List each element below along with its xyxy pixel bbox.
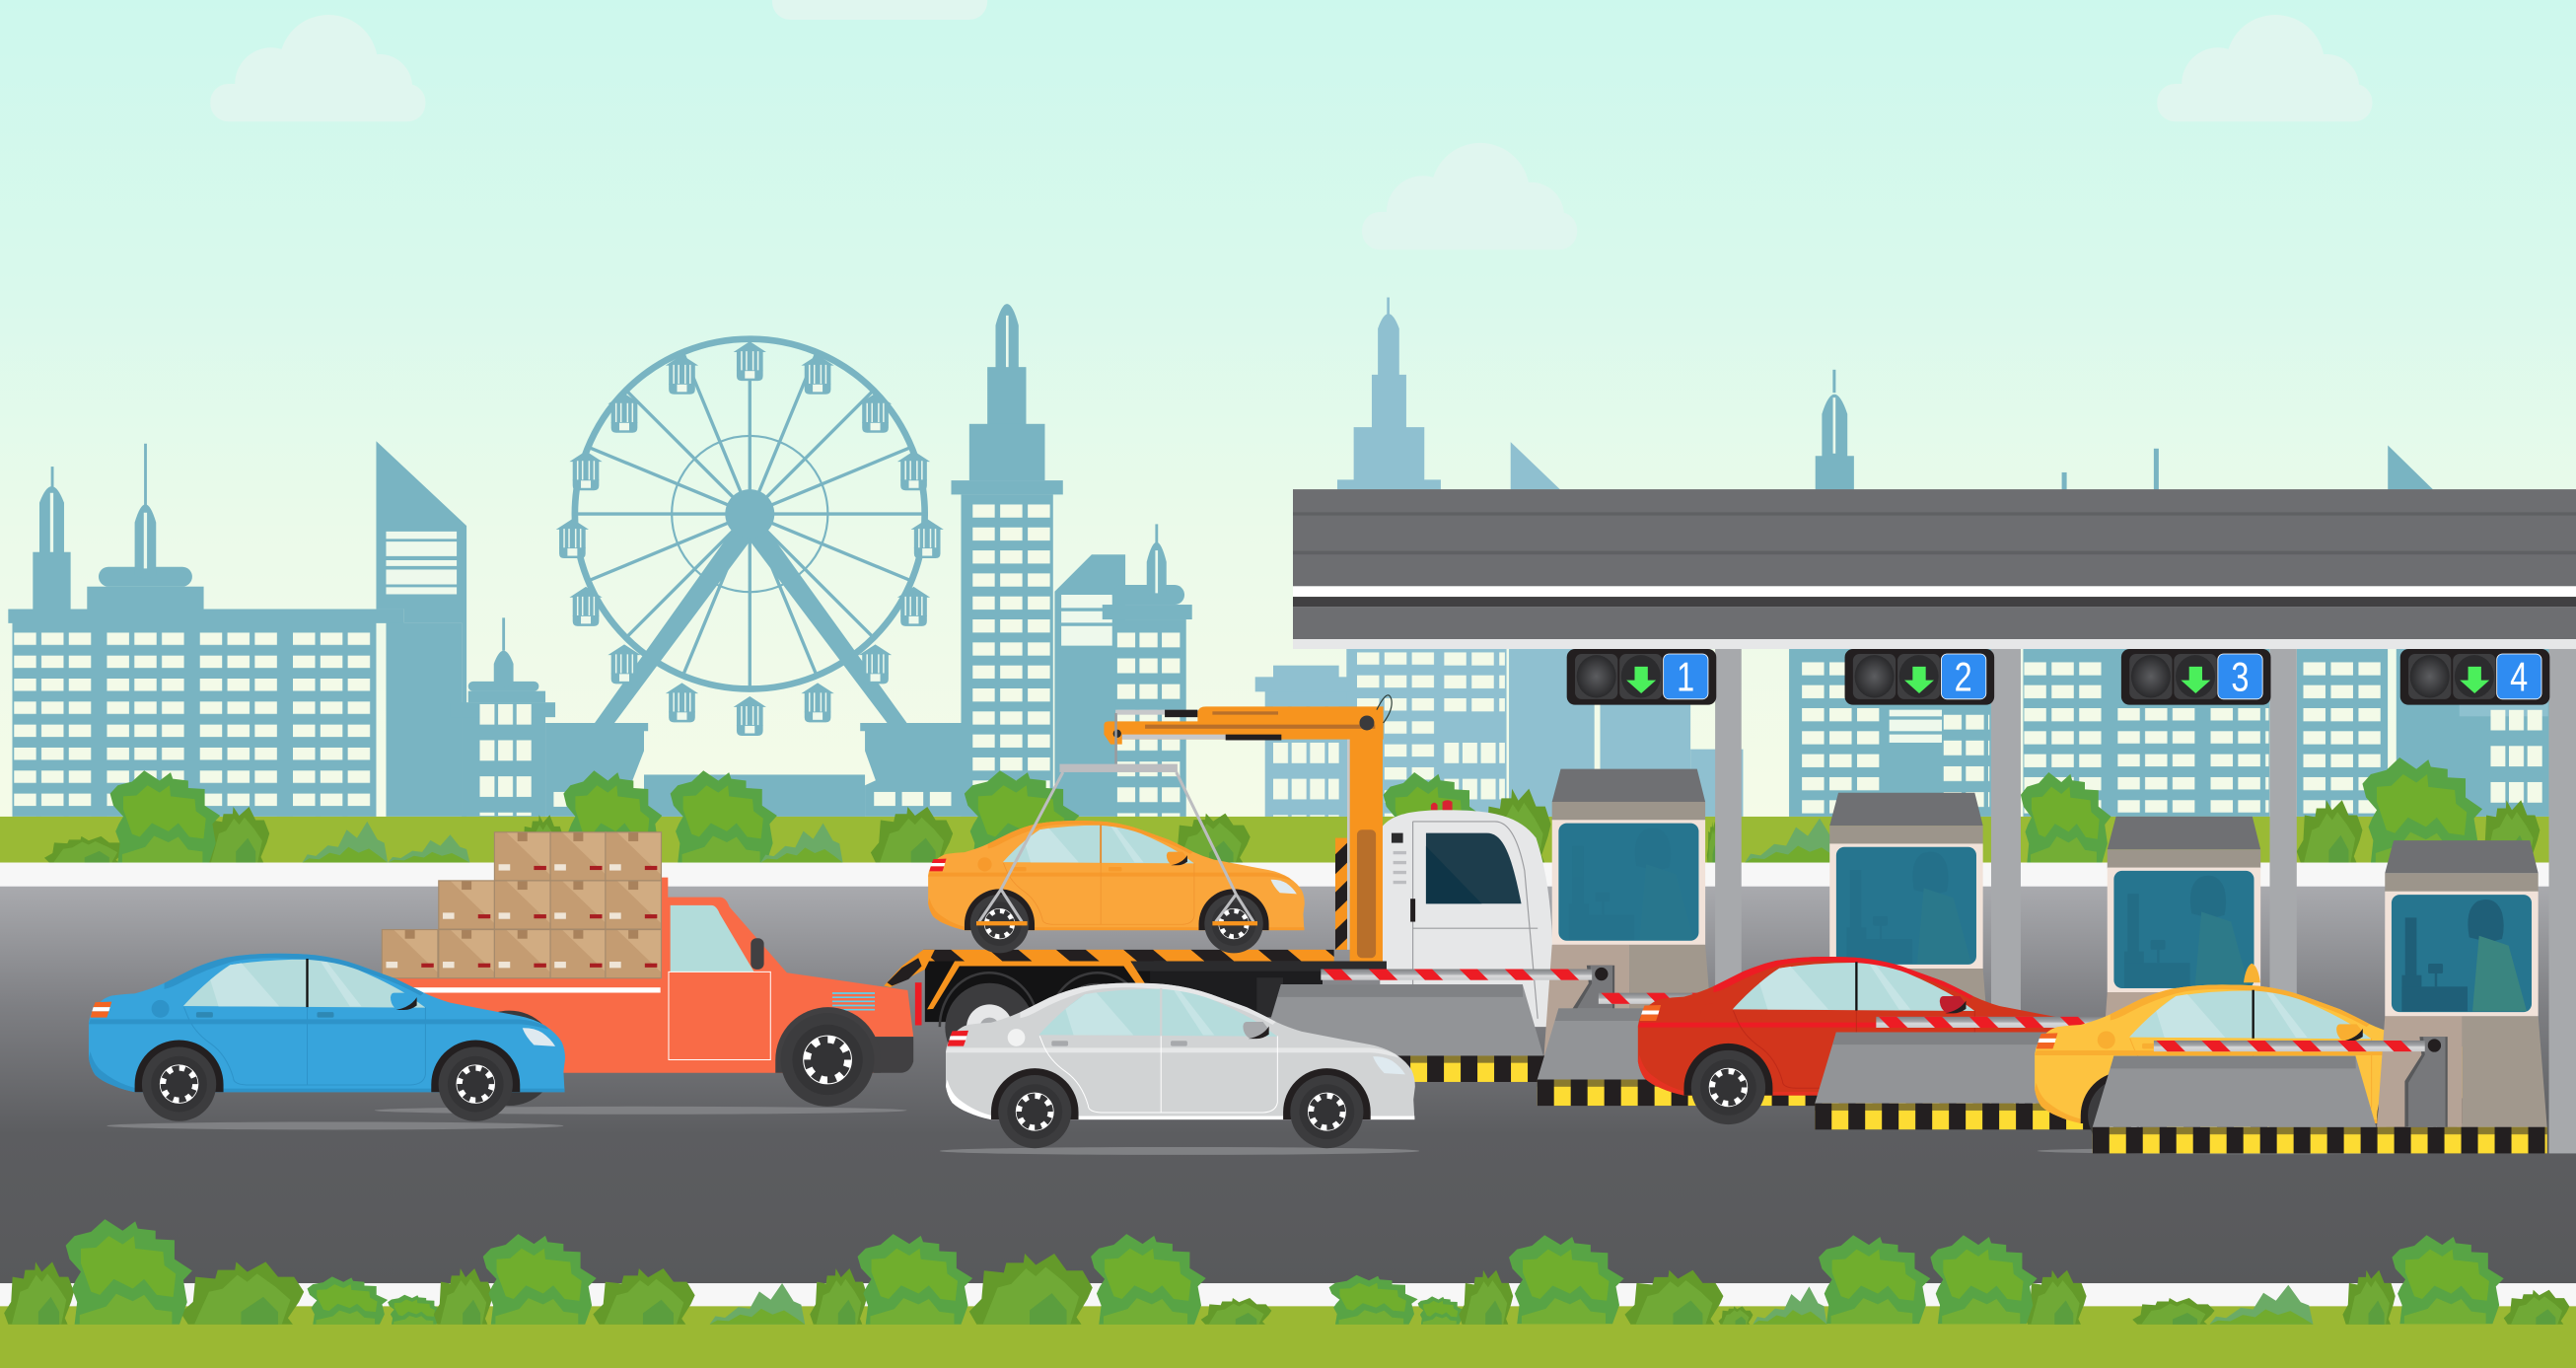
far skyline behind canopy bbox=[1255, 298, 1743, 817]
blue car bbox=[89, 954, 565, 1129]
back row bushes bbox=[44, 757, 2540, 863]
tall tower bbox=[952, 304, 1063, 817]
right skyline behind canopy bbox=[1789, 370, 2549, 817]
sky background bbox=[0, 0, 2576, 817]
red car bbox=[1638, 957, 2114, 1124]
toll island 3 bbox=[1815, 1013, 2269, 1129]
road bbox=[0, 887, 2576, 1286]
lane signal 4 bbox=[2400, 649, 2549, 705]
toll island 1 bbox=[1259, 966, 1714, 1082]
toll island 2 bbox=[1538, 989, 1992, 1106]
lane signal 3: 3 bbox=[2231, 654, 2249, 699]
pickup shadow bbox=[375, 1107, 907, 1115]
toll booth 1 bbox=[1544, 769, 1714, 1055]
left skyline bbox=[8, 304, 1192, 817]
triangular tower bbox=[376, 441, 466, 817]
toll island 4 bbox=[2093, 1037, 2547, 1153]
truck chassis bbox=[884, 950, 1387, 1072]
toll booth 3 bbox=[2100, 817, 2269, 1104]
grass strip bbox=[0, 817, 2576, 863]
bottom curb bbox=[0, 1283, 2576, 1307]
silver car bbox=[940, 983, 1419, 1155]
pickup body bbox=[394, 878, 913, 1073]
tow truck bbox=[884, 695, 1554, 1072]
lane signal 2: 2 bbox=[1955, 654, 1972, 699]
truck cab bbox=[1380, 800, 1554, 1027]
crane pillar bbox=[1335, 731, 1383, 962]
sidewalk bbox=[0, 863, 2576, 888]
toll booth 4 bbox=[2377, 840, 2547, 1127]
toll plaza canopy bbox=[1293, 489, 2576, 649]
lane signal 3 bbox=[2121, 649, 2270, 705]
ferris wheel bbox=[545, 336, 965, 817]
crane arm bbox=[1104, 695, 1392, 745]
small domed building bbox=[450, 617, 555, 817]
clouds bbox=[210, 0, 2372, 250]
cardboard boxes bbox=[382, 832, 661, 978]
front row bushes bbox=[4, 1219, 2569, 1325]
toll booth 2 bbox=[1822, 793, 1992, 1079]
far building windows bbox=[1273, 652, 1505, 817]
right domed tower bbox=[1103, 524, 1192, 817]
lane signal 1 bbox=[1567, 649, 1716, 705]
left office building bbox=[8, 444, 404, 817]
pickup truck bbox=[375, 832, 913, 1115]
canopy pillars bbox=[1715, 649, 2576, 1153]
car lifted on tow truck bbox=[928, 821, 1305, 953]
lifting frame and cables bbox=[976, 713, 1257, 925]
lane signal 2 bbox=[1845, 649, 1994, 705]
lane signal 1: 1 bbox=[1677, 654, 1694, 699]
right slatted tower bbox=[1054, 554, 1125, 817]
yellow taxi bbox=[2035, 964, 2511, 1154]
bottom grass bbox=[0, 1306, 2576, 1368]
lane signal 4: 4 bbox=[2510, 654, 2528, 699]
